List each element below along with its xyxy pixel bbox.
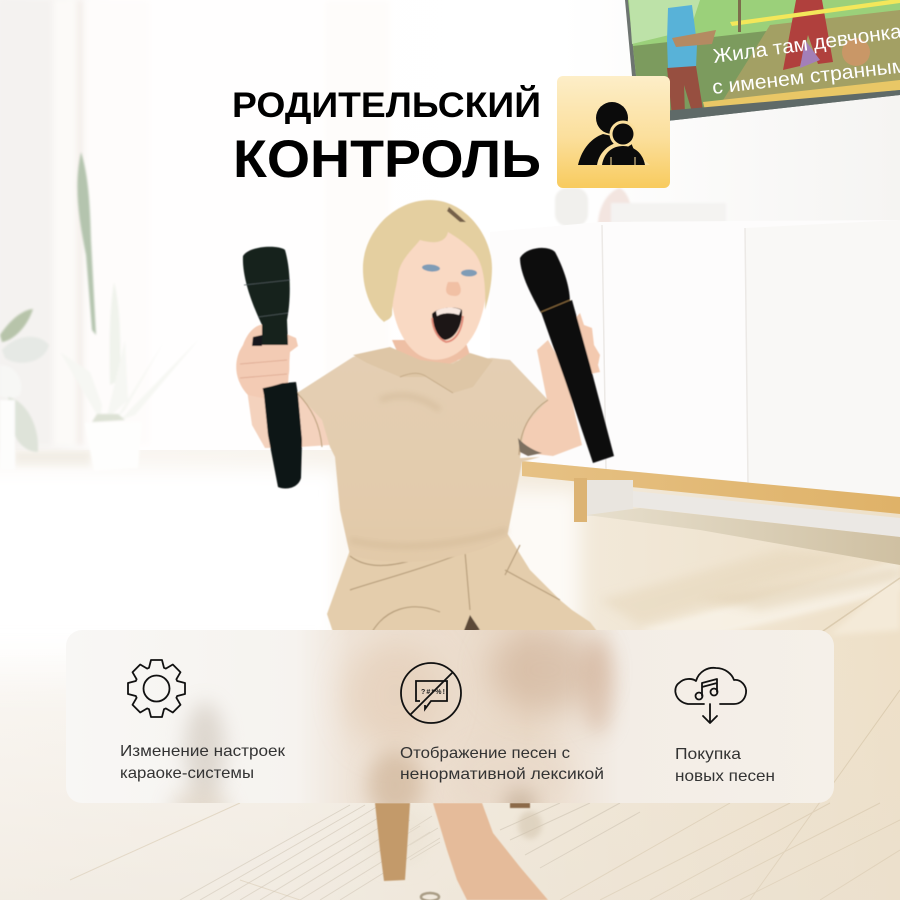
icon: crossed-out speech bubble <box>401 663 461 723</box>
hair <box>363 200 492 322</box>
title: КОНТРОЛЬ <box>233 130 541 189</box>
floor planks <box>70 550 900 900</box>
item: profanity filter <box>400 663 604 783</box>
nose <box>446 282 461 296</box>
torso / tee <box>297 348 548 562</box>
white cabinet <box>490 188 900 565</box>
neck <box>392 340 470 368</box>
left microphone <box>243 247 302 488</box>
label: Изменение настроек <box>120 743 286 760</box>
icon: crossed-out speech bubble: ?#*%! <box>421 689 445 696</box>
icon: parent and child badge <box>557 76 670 188</box>
icon: gear <box>128 660 185 717</box>
TV screen <box>625 0 900 124</box>
left fingers over mic <box>237 346 289 392</box>
shirt folds <box>350 396 507 546</box>
photo: child with microphones <box>236 200 614 900</box>
head <box>391 227 488 360</box>
mouth <box>432 307 462 340</box>
label: караоке-системы <box>120 765 254 782</box>
left hand <box>236 324 298 398</box>
title <box>232 85 541 189</box>
snake plant leaf <box>77 152 96 335</box>
icon: cloud music download <box>675 668 746 723</box>
panel: parental control options <box>66 630 834 803</box>
item: buying new songs <box>675 668 775 785</box>
label: новых песен <box>675 768 775 785</box>
hood <box>353 347 493 393</box>
label: Отображение песен с <box>400 745 570 762</box>
TV screen: с именем странным <box>711 55 900 99</box>
wooden bar <box>522 461 900 514</box>
plant pot <box>85 422 142 471</box>
label <box>400 745 604 783</box>
label <box>675 746 775 785</box>
pants <box>327 533 600 635</box>
eyes <box>422 264 440 272</box>
floor <box>0 450 900 900</box>
foot and stool leg <box>375 803 410 881</box>
title: РОДИТЕЛЬСКИЙ <box>232 85 541 125</box>
label: ненормативной лексикой <box>400 766 604 783</box>
yellow stripes <box>730 0 900 26</box>
cartoon figures <box>667 5 697 70</box>
left arm <box>247 390 330 448</box>
right arm <box>517 340 582 456</box>
karaoke lyrics: Жила там девчонка <box>712 21 900 68</box>
label <box>120 743 286 782</box>
right hand fingers <box>572 313 600 375</box>
curtains <box>0 0 390 480</box>
large leaves <box>0 309 33 342</box>
plants on the left <box>0 152 200 471</box>
item: karaoke settings <box>120 660 286 782</box>
right microphone <box>520 248 614 463</box>
label: Покупка <box>675 746 741 763</box>
